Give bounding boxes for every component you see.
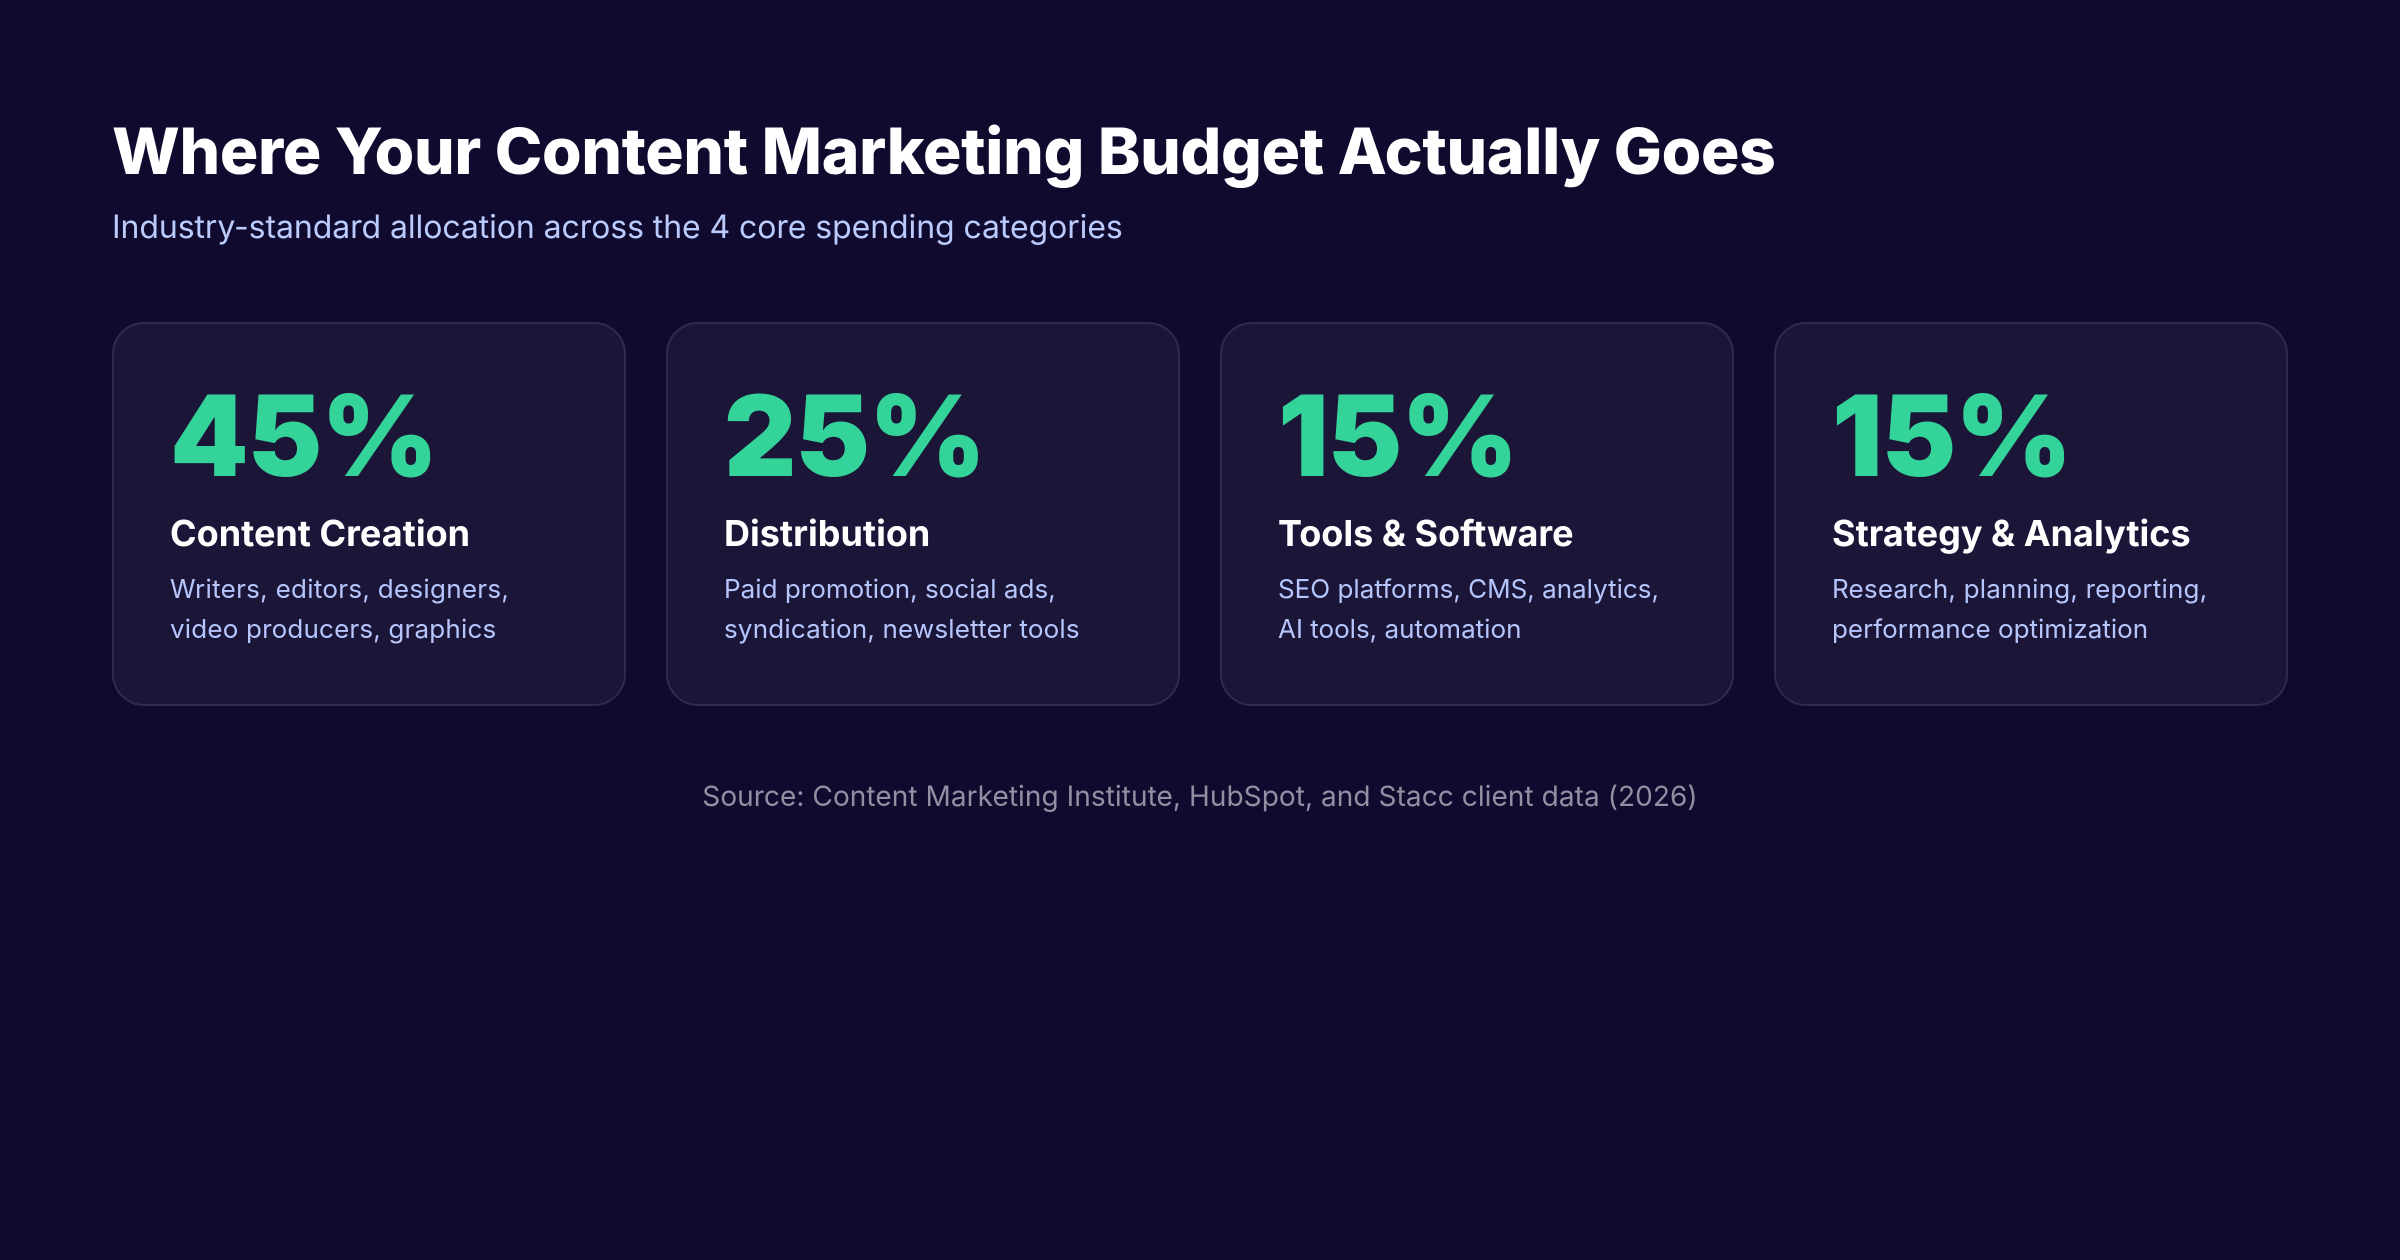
label: content creation: Content Creation (170, 511, 470, 555)
description: distribution: Paid promotion, social ads, (724, 574, 1056, 605)
description: content creation: Writers, editors, designers, (170, 574, 509, 605)
description: tools and software: SEO platforms, CMS, analytics, (1278, 574, 1659, 605)
source note: Source: Content Marketing Institute, HubSpot, and Stacc client data (2026) (702, 779, 1698, 813)
percentage: 15% tools: 15% (1278, 368, 1517, 504)
panel: strategy and analytics (1774, 322, 2288, 706)
description: tools and software (1278, 574, 1659, 645)
panel: distribution (666, 322, 1180, 706)
panel: tools and software (1220, 322, 1734, 706)
percentage: 25%: 25% (724, 368, 985, 504)
panel: content creation (112, 322, 626, 706)
label: tools and software: Tools & Software (1278, 511, 1574, 555)
description: distribution (724, 574, 1080, 645)
percentage: 45%: 45% (170, 368, 437, 504)
subtitle: Industry-standard allocation across the 4 core spending categories (112, 207, 1123, 246)
description: content creation (170, 574, 509, 645)
percentage: 15% strategy: 15% (1832, 368, 2071, 504)
description: strategy and analytics (1832, 574, 2207, 645)
description: tools and software: AI tools, automation (1278, 614, 1521, 645)
label: distribution: Distribution (724, 511, 930, 555)
description: distribution: syndication, newsletter tools (724, 614, 1080, 645)
description: strategy and analytics: Research, planning, reporting, (1832, 574, 2207, 605)
description: content creation: video producers, graphics (170, 614, 496, 645)
description: strategy and analytics: performance optimization (1832, 614, 2148, 645)
title: Where Your Content Marketing Budget Actually Goes (112, 113, 1776, 190)
label: strategy and analytics: Strategy & Analytics (1832, 511, 2191, 555)
